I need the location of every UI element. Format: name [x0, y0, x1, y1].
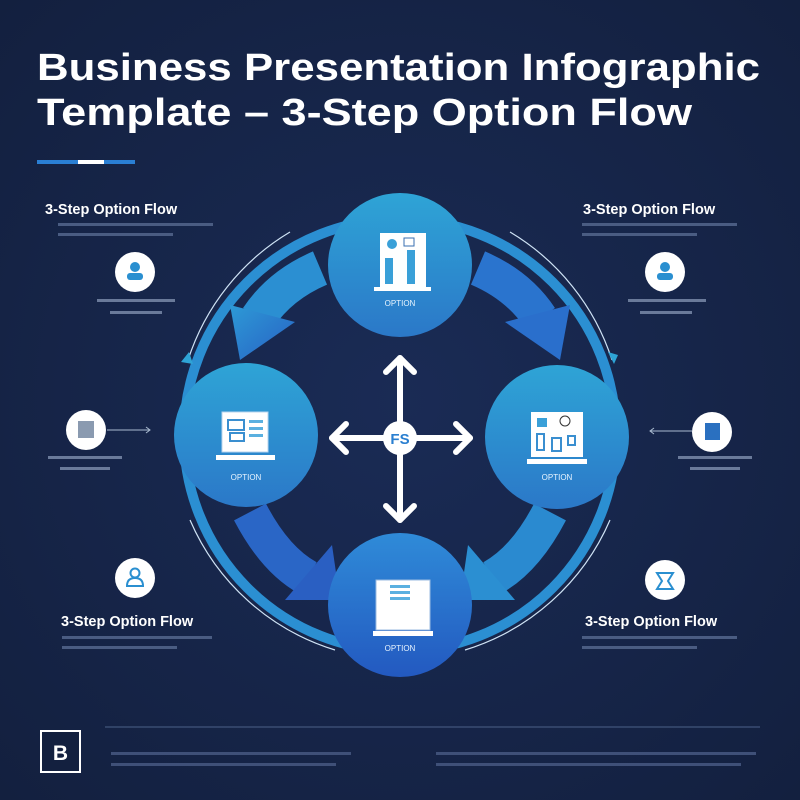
text block: bottom left: 3-Step Option Flow — [61, 614, 194, 630]
text block: bottom right — [582, 614, 737, 649]
circle: bottom option: OPTION — [385, 644, 416, 653]
footer divider — [105, 726, 760, 728]
title underline bar — [37, 160, 135, 164]
icon: book right with arrow — [650, 412, 732, 452]
icon: person bottom left — [115, 558, 155, 598]
circle: top option: OPTION — [385, 299, 416, 308]
text: top right caption — [628, 299, 706, 314]
curved arrow: top to right — [478, 268, 570, 360]
central cross arrows — [332, 358, 470, 520]
text block: top left: 3-Step Option Flow — [45, 202, 178, 218]
outer ring — [181, 219, 618, 651]
text block: top right — [582, 202, 737, 236]
text: top left caption — [97, 299, 175, 314]
central cross arrows: FS — [390, 431, 410, 448]
footer logo B: B — [53, 742, 68, 765]
footer logo B — [41, 731, 80, 772]
icon: document left with arrow — [66, 410, 150, 450]
text block: top left — [45, 202, 213, 236]
text block: bottom right: 3-Step Option Flow — [585, 614, 718, 630]
icon: person top left — [115, 252, 155, 292]
curved arrow: top to left — [230, 268, 320, 360]
icon: bottom right — [645, 560, 685, 600]
circle: right option: OPTION — [542, 473, 573, 482]
circle: top option — [328, 193, 472, 337]
circle: bottom option — [328, 533, 472, 677]
circle: left option — [174, 363, 318, 507]
text block: bottom left — [61, 614, 212, 649]
title — [37, 47, 760, 134]
icon: person top right — [645, 252, 685, 292]
footer text — [111, 752, 756, 766]
circle: right option — [485, 365, 629, 509]
title: Business Presentation Infographic — [37, 47, 760, 89]
circle: left option: OPTION — [231, 473, 262, 482]
curved arrow: right to bottom — [460, 512, 550, 600]
text: right caption — [678, 456, 752, 470]
title: Template – 3-Step Option Flow — [37, 92, 693, 134]
text block: top right: 3-Step Option Flow — [583, 202, 716, 218]
text: left caption — [48, 456, 122, 470]
curved arrow: left to bottom — [250, 512, 340, 600]
